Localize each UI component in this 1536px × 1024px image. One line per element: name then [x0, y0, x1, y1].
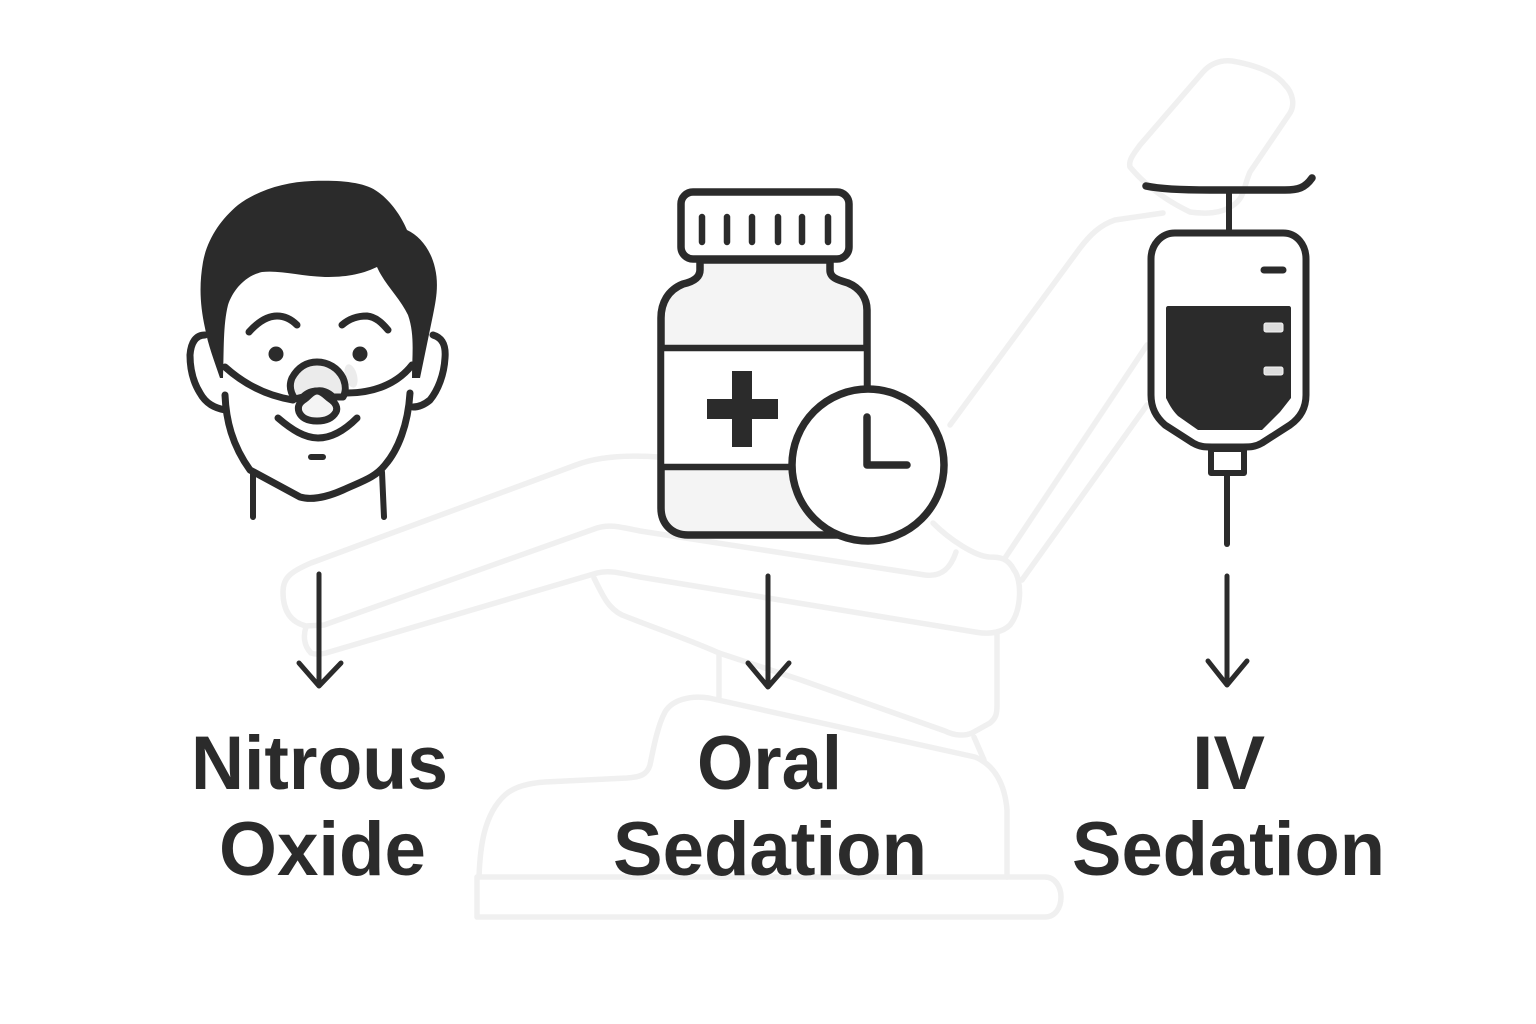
- mouth: [278, 418, 357, 438]
- arrow: IV sedation: [1208, 576, 1247, 685]
- clock: [792, 389, 944, 541]
- hanger bar: [1146, 178, 1312, 190]
- eyebrows: [249, 316, 388, 332]
- label: IV sedation: Sedation: [1072, 807, 1385, 892]
- label band: [661, 348, 867, 467]
- hair: [201, 181, 437, 378]
- label: oral sedation: Sedation: [613, 807, 927, 892]
- cannula tubes: [225, 365, 412, 400]
- icon: face with nasal mask: [190, 181, 445, 517]
- ears: [190, 335, 445, 410]
- lower scale marks: [1264, 323, 1283, 375]
- bottle body: [661, 260, 867, 535]
- nasal mask: [290, 362, 345, 421]
- upper scale mark: [1264, 266, 1283, 274]
- label: IV sedation: [1072, 721, 1385, 892]
- icon: medicine bottle with clock: [661, 192, 944, 541]
- chin mark: [311, 454, 323, 460]
- drip line: [1224, 473, 1230, 544]
- label: nitrous oxide: Oxide: [219, 807, 426, 892]
- arrow: nitrous oxide: [299, 574, 341, 686]
- icon: IV bag: [1146, 178, 1312, 544]
- jaw and neck: [225, 393, 410, 517]
- label: oral sedation: Oral: [697, 721, 842, 806]
- background: dental chair outline: [283, 61, 1293, 917]
- medical cross: [707, 371, 778, 447]
- label: nitrous oxide: Nitrous: [191, 721, 448, 806]
- label: oral sedation: [613, 721, 927, 892]
- label: IV sedation: IV: [1192, 721, 1265, 806]
- eyes: [268, 346, 368, 362]
- mask smudge: [342, 363, 360, 389]
- cap ridges: [702, 217, 828, 242]
- fluid level: [1166, 306, 1291, 430]
- bottle cap: [681, 192, 849, 259]
- arrow: oral sedation: [748, 576, 789, 687]
- hanger stem: [1226, 190, 1232, 232]
- label: nitrous oxide: [191, 721, 448, 892]
- connector: [1211, 449, 1244, 473]
- bag outline: [1151, 233, 1306, 447]
